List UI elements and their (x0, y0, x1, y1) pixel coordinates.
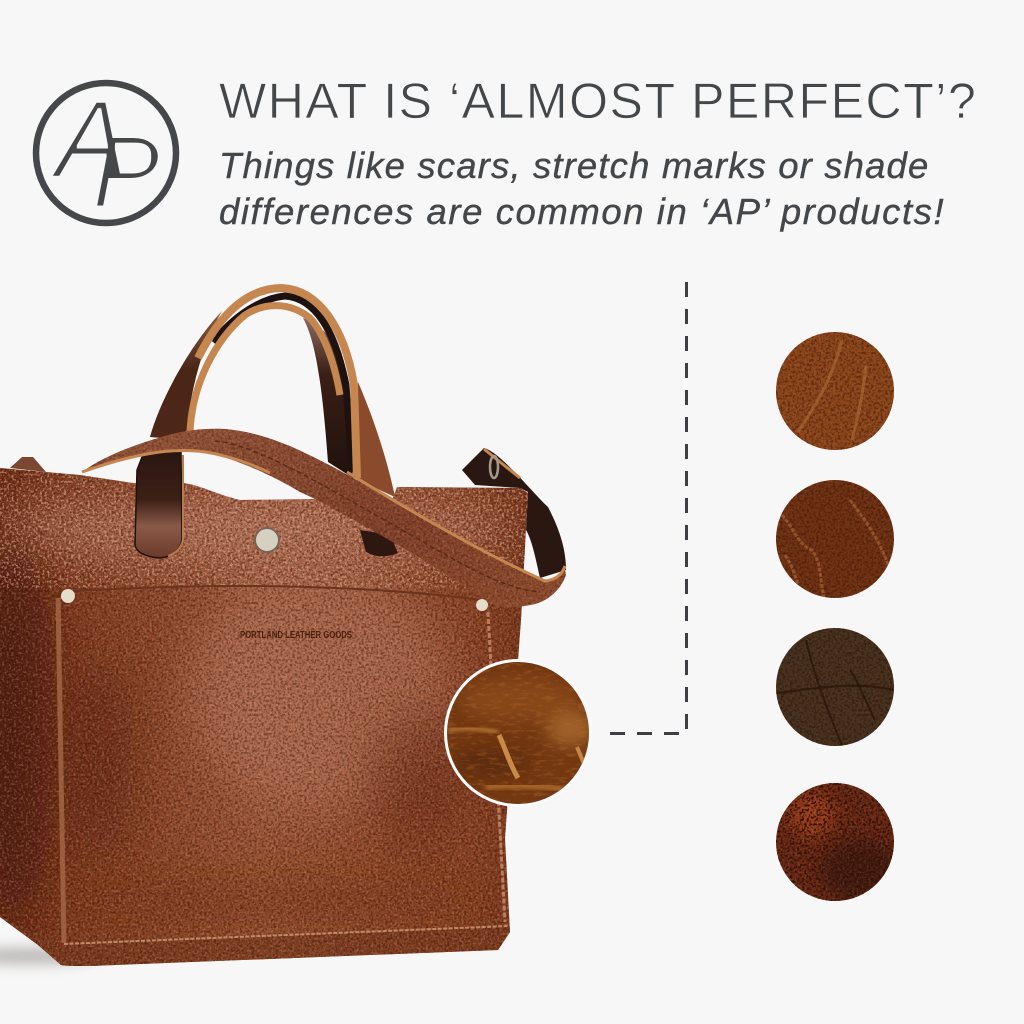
handle inner tan edge (190, 306, 340, 432)
right pocket rivet (476, 599, 488, 611)
rear shoulder strap (462, 448, 566, 578)
swatch: chocolate leather with wrinkles (776, 628, 894, 746)
logo: AP circle: P (92, 115, 160, 229)
dashed connector line (610, 282, 687, 735)
handle outer tan edge (198, 288, 357, 478)
pocket left seam (58, 598, 64, 943)
strap tan edges (82, 451, 565, 581)
logo: AP circle: A (49, 78, 128, 201)
left handle strap (150, 311, 222, 440)
bag shadow (0, 947, 100, 965)
swatch: tan leather with scars (776, 332, 894, 450)
pocket snap rivet (255, 528, 279, 552)
swatch: dark brown leather with stretch marks (776, 480, 894, 598)
subtitle: Things like scars, stretch marks or shade (219, 145, 929, 186)
left pocket rivet (61, 589, 75, 603)
subtitle: differences are common in ‘AP’ products! (219, 191, 945, 232)
strap texture (80, 425, 570, 610)
swatch: mottled red-brown leather (776, 783, 900, 901)
strap stitching (215, 441, 540, 592)
front handle loop (135, 452, 182, 558)
leather shading and grain (0, 468, 530, 975)
metal ring (490, 456, 498, 478)
back right leather flap (358, 382, 395, 497)
pocket seams and stitching (64, 926, 508, 944)
zoom circle: leather detail (444, 659, 594, 807)
rear strap tan edge (484, 449, 520, 478)
right handle strap (303, 318, 353, 478)
pocket top edge (58, 586, 482, 600)
logo: AP circle (36, 78, 176, 229)
front loop tan edge (168, 455, 183, 556)
lower handle tab (360, 530, 398, 556)
left side tab (10, 457, 46, 472)
shoulder strap (82, 429, 566, 607)
embossed maker mark: PORTLAND LEATHER GOODS (240, 630, 352, 641)
pocket right seam (488, 612, 505, 922)
tote bag photo (0, 288, 570, 975)
handle black gap (213, 296, 352, 472)
subtitle (219, 145, 945, 232)
title: WHAT IS ‘ALMOST PERFECT’? (219, 73, 977, 129)
bag body (0, 468, 528, 966)
